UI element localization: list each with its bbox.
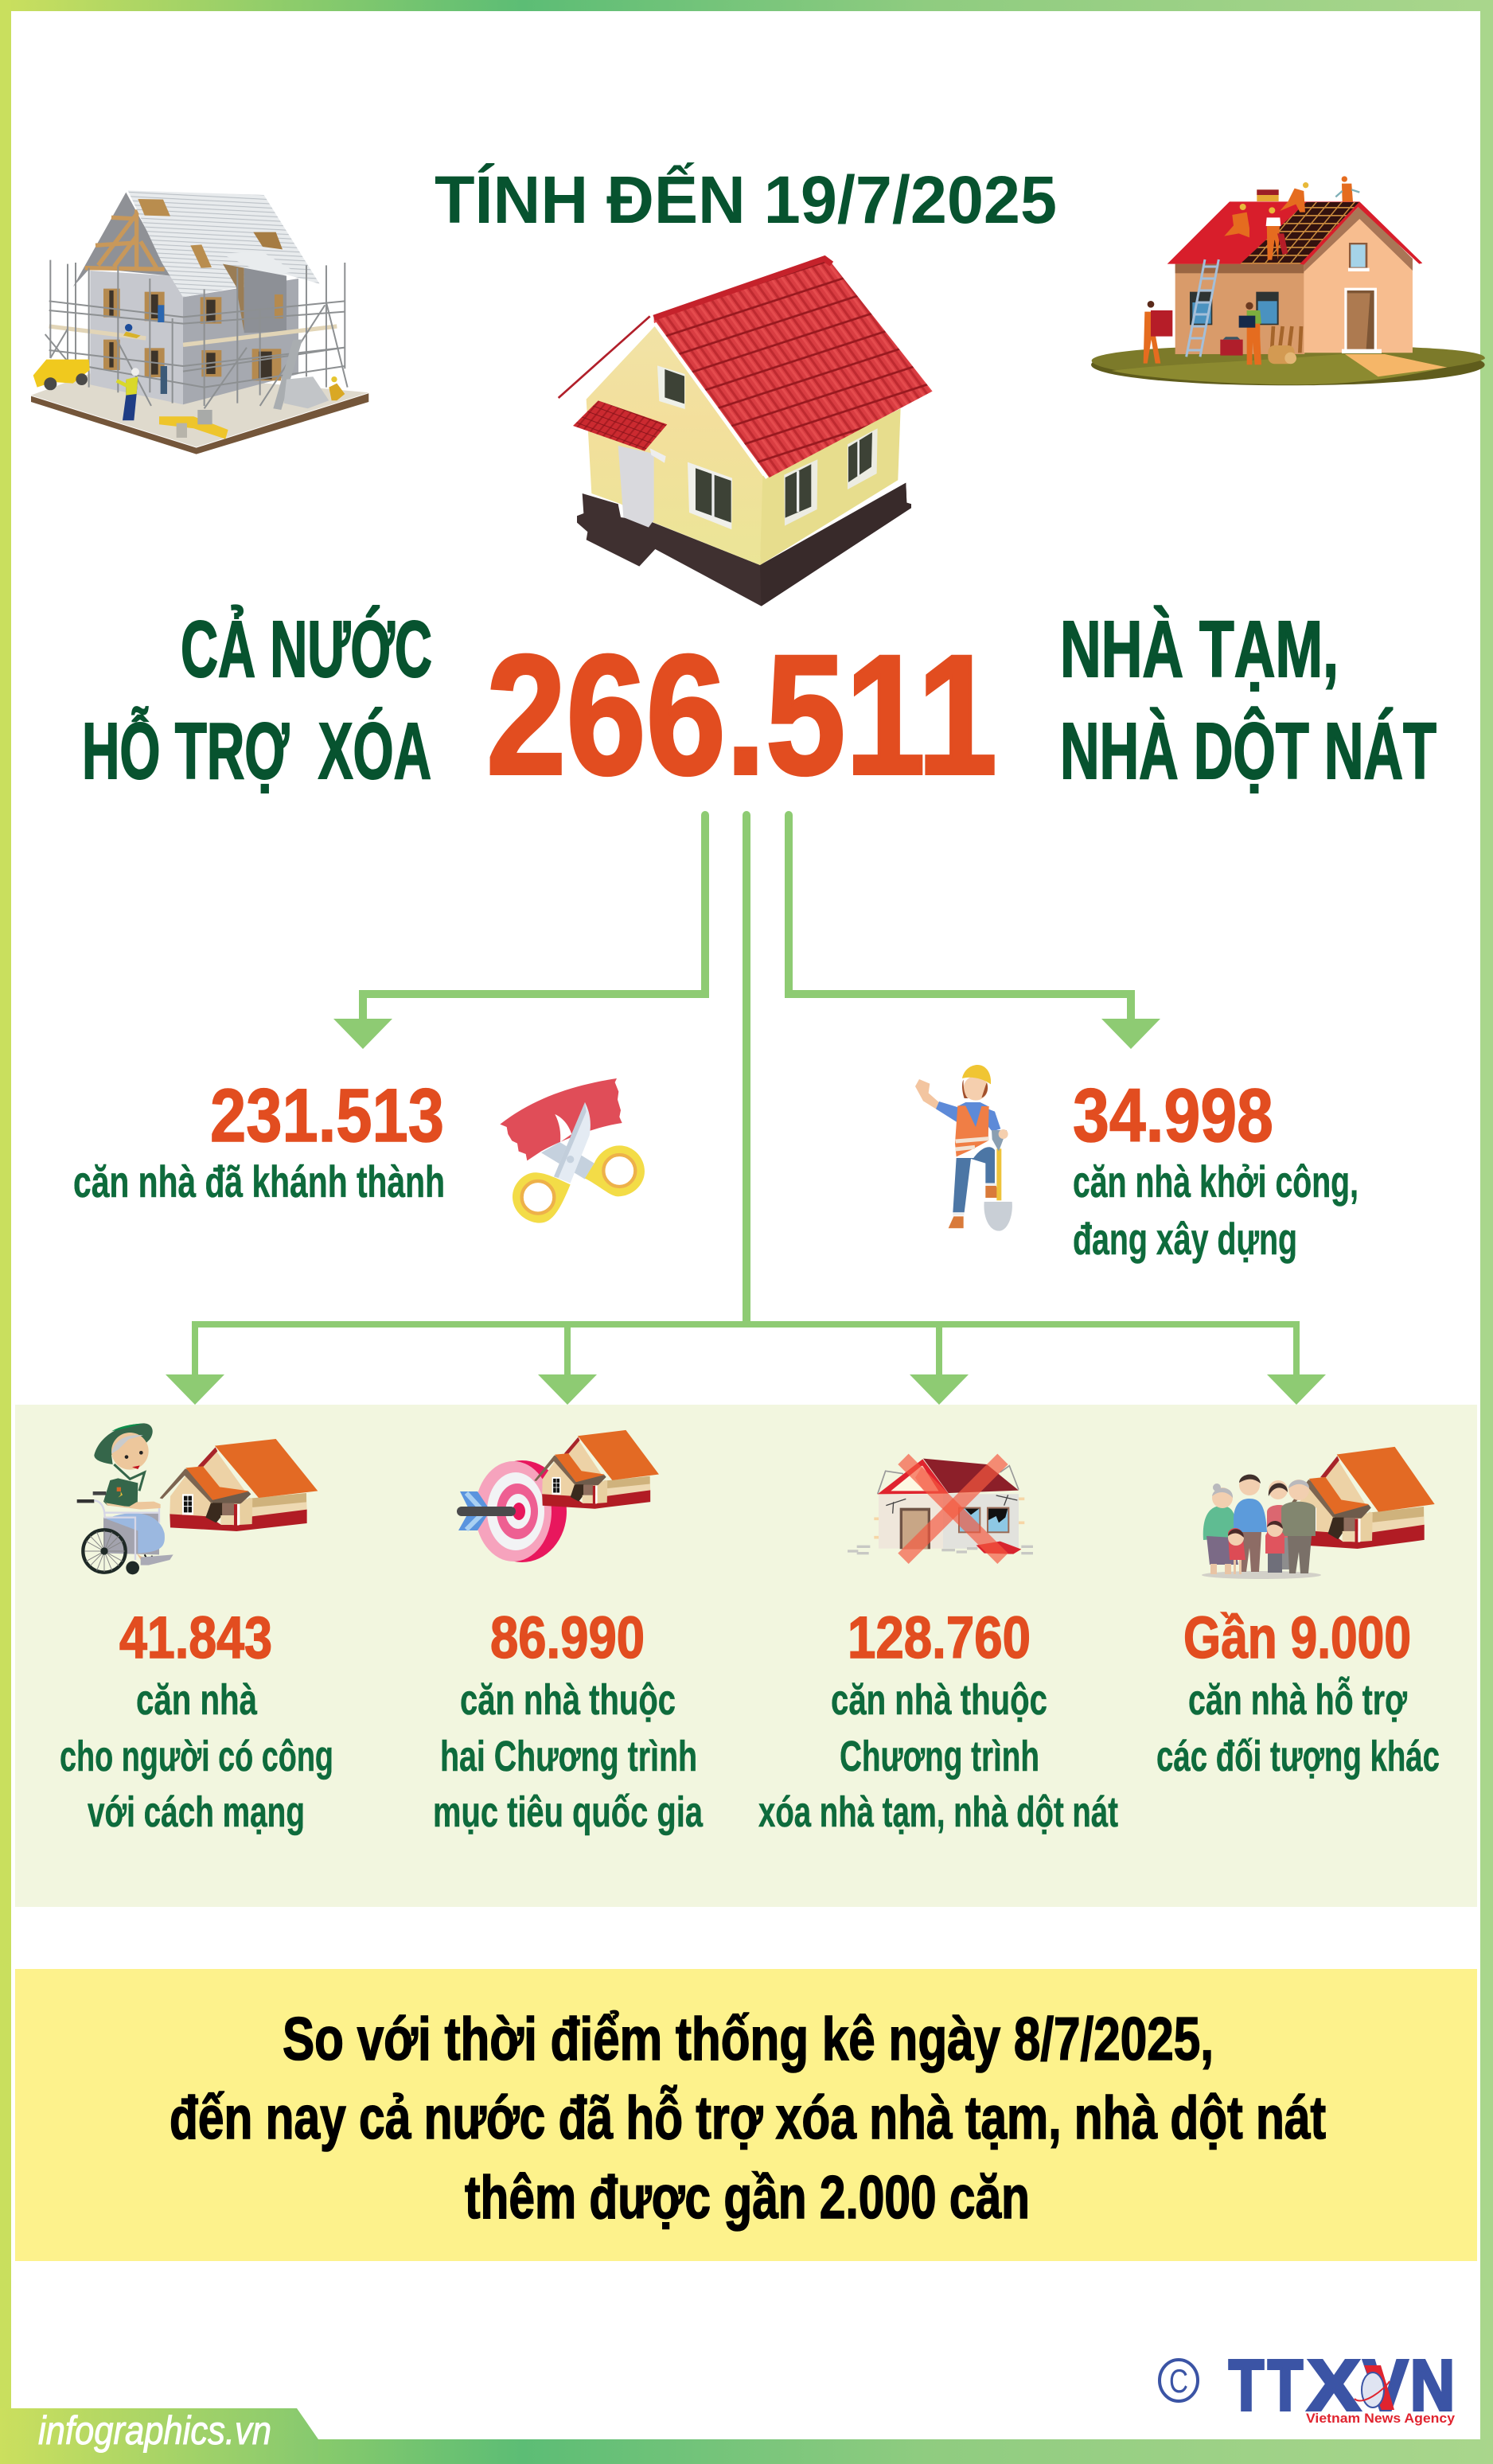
panel: yellow comparison note: So với thời điểm thống kê ngày 8/7/2025,	[283, 2006, 1214, 2073]
panel: yellow comparison note: thêm được gần 2.000 căn	[465, 2164, 1030, 2232]
left heading	[82, 604, 432, 796]
icon: crossed-out damaged house	[848, 1454, 1033, 1564]
stat: 231.513 inaugurated: 231.513	[210, 1074, 444, 1158]
column 2: two national programmes: căn nhà thuộc	[460, 1676, 676, 1724]
stat: 231.513 inaugurated: căn nhà đã khánh thành	[73, 1156, 445, 1207]
logo: TTXVN copyright	[1160, 2346, 1456, 2426]
column 1: people with merit: căn nhà	[136, 1676, 258, 1724]
icon: family with house	[1202, 1447, 1435, 1579]
logo: TTXVN copyright: V	[1363, 2346, 1408, 2426]
column 3: elimination programme: 128.760	[848, 1604, 1031, 1671]
image: main house with red tile roof	[559, 257, 933, 606]
stat: 34.998 under construction: căn nhà khởi công,	[1073, 1156, 1359, 1207]
column 4: other beneficiaries: Gần 9.000	[1183, 1604, 1411, 1671]
column 3: elimination programme	[758, 1604, 1118, 1836]
icon: scissors cutting ribbon	[500, 1078, 645, 1223]
icon: construction worker with shovel	[915, 1065, 1012, 1231]
logo: TTXVN copyright: C	[1169, 2362, 1188, 2400]
column 2: two national programmes: mục tiêu quốc gia	[433, 1788, 704, 1836]
logo: TTXVN copyright: T	[1229, 2346, 1264, 2426]
logo: TTXVN copyright: T	[1268, 2346, 1303, 2426]
left heading: CẢ NƯỚC	[181, 604, 432, 694]
column 4: other beneficiaries	[1156, 1604, 1440, 1780]
icon: target with arrow and house	[457, 1430, 659, 1562]
column 3: elimination programme: Chương trình	[840, 1733, 1039, 1780]
column 3: elimination programme: xóa nhà tạm, nhà dột nát	[758, 1788, 1118, 1836]
image: workers repairing roof of a brick house	[1091, 176, 1485, 385]
right heading: NHÀ TẠM,	[1060, 605, 1339, 694]
footer tab: infographics.vn	[0, 2408, 318, 2464]
stat: 231.513 inaugurated	[73, 1074, 445, 1207]
arrows: connector tree	[166, 811, 1326, 1405]
column 1: people with merit	[60, 1604, 333, 1836]
main number: 266.511	[486, 620, 997, 810]
stat: 34.998 under construction: đang xây dựng	[1073, 1214, 1297, 1264]
panel: yellow comparison note	[15, 1969, 1477, 2261]
panel: four categories	[15, 1405, 1477, 1907]
logo: TTXVN copyright: N	[1410, 2346, 1455, 2426]
column 4: other beneficiaries: căn nhà hỗ trợ	[1188, 1676, 1407, 1724]
column 2: two national programmes	[433, 1604, 704, 1836]
stat: 34.998 under construction	[1073, 1074, 1359, 1264]
stat: 34.998 under construction: 34.998	[1073, 1074, 1273, 1158]
column 1: people with merit: 41.843	[119, 1604, 272, 1671]
column 2: two national programmes: hai Chương trình	[440, 1733, 697, 1780]
icon: veteran in wheelchair with house	[77, 1423, 318, 1574]
column 3: elimination programme: căn nhà thuộc	[831, 1676, 1047, 1724]
image: house under construction with scaffolding	[31, 190, 368, 454]
title: TÍNH ĐẾN 19/7/2025	[435, 162, 1057, 237]
logo: TTXVN copyright: Vietnam News Agency	[1306, 2411, 1456, 2426]
footer tab: infographics.vn: infographics.vn	[38, 2408, 271, 2453]
logo: TTXVN copyright: X	[1308, 2346, 1360, 2426]
left heading: HỖ TRỢ XÓA	[82, 707, 431, 796]
column 1: people with merit: với cách mạng	[88, 1788, 305, 1836]
right heading	[1060, 605, 1436, 796]
column 2: two national programmes: 86.990	[490, 1604, 645, 1671]
column 1: people with merit: cho người có công	[60, 1733, 333, 1780]
